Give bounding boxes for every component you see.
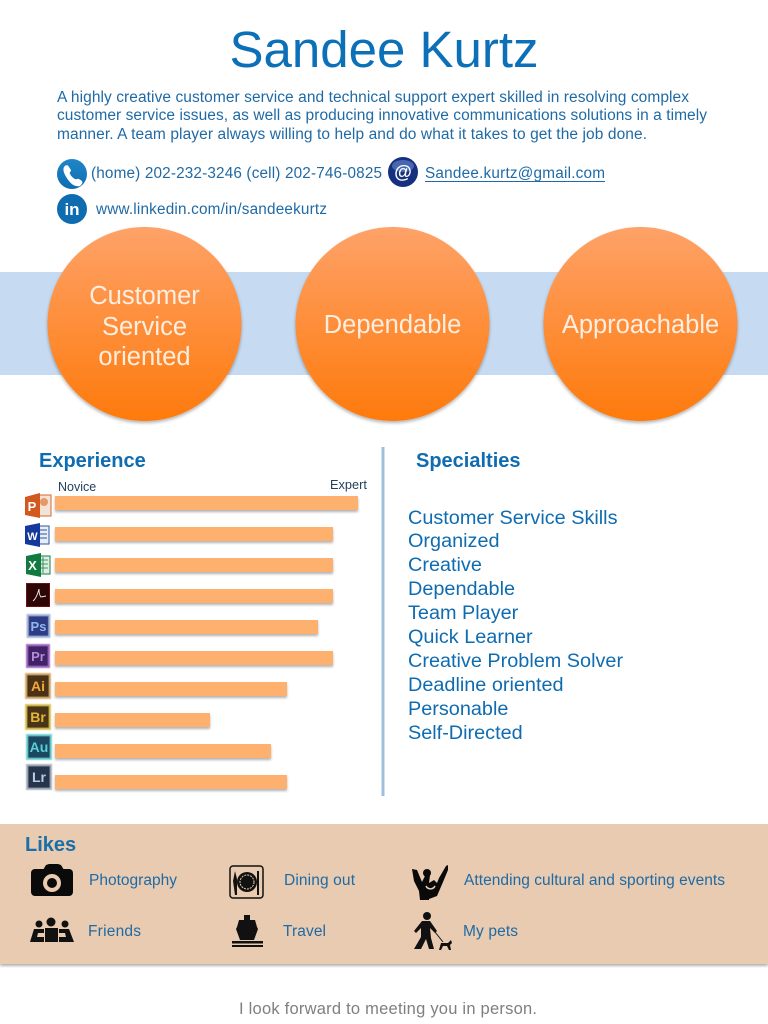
icon: premiere: [27, 645, 49, 667]
icon: events: [412, 865, 448, 900]
trait circle: customer service oriented: Service: [102, 313, 187, 341]
summary text: manner. A team player always willing to help and do what it takes to get the job done.: [57, 126, 647, 143]
icon: audition: Au: [30, 739, 48, 755]
heading: likes: Likes: [25, 834, 76, 856]
likes label: travel: Travel: [283, 923, 326, 940]
heading: experience: Experience: [39, 450, 146, 472]
icon: photoshop: Ps: [31, 619, 46, 634]
likes label: friends: Friends: [88, 923, 141, 940]
trait circle: dependable: Dependable: [324, 311, 461, 339]
trait circle: customer service oriented: oriented: [98, 343, 191, 371]
likes label: photography: Photography: [89, 872, 177, 889]
contact row: [57, 157, 605, 224]
trait circle: approachable: Approachable: [562, 311, 719, 339]
icon: premiere: Pr: [31, 649, 45, 664]
summary text: customer service issues, as well as producing innovative communications solutions in a timely: [57, 107, 707, 124]
specialties list: Organized: [408, 530, 500, 552]
trait circle: dependable: [296, 227, 490, 421]
icon: powerpoint: [25, 493, 51, 518]
title: Sandee Kurtz: [230, 21, 538, 78]
icon: bridge: [26, 705, 50, 729]
trait circle: customer service oriented: [48, 227, 242, 421]
icon: excel: X: [28, 558, 37, 573]
software icons: [25, 493, 51, 789]
trait circle: customer service oriented: Customer: [89, 282, 200, 310]
specialties list: Team Player: [408, 602, 519, 624]
icon: email: @: [394, 162, 412, 182]
icon: dog walker: [414, 912, 452, 950]
icon: dining: [230, 866, 263, 898]
specialties list: Personable: [408, 698, 508, 720]
heading: specialties: Specialties: [416, 450, 521, 472]
icon: acrobat: [26, 584, 50, 606]
closing line: I look forward to meeting you in person.: [239, 1000, 537, 1018]
email: Sandee.kurtz@gmail.com: [425, 165, 605, 182]
specialties list: Creative Problem Solver: [408, 650, 623, 672]
icon: friends: [30, 918, 74, 942]
icon: lightroom: [27, 765, 51, 789]
specialties list: Dependable: [408, 578, 515, 600]
icon: word: W: [27, 531, 38, 543]
icon: ship: [232, 915, 263, 947]
icon: camera: [31, 864, 73, 896]
panel: likes: [0, 824, 768, 964]
icon: audition: [27, 735, 51, 759]
specialties list: Self-Directed: [408, 722, 523, 744]
label: expert: Expert: [330, 477, 367, 492]
summary text: [57, 89, 707, 143]
likes label: my pets: My pets: [463, 923, 518, 940]
icon: linkedin: in: [64, 200, 80, 219]
icon: linkedin: [57, 194, 87, 224]
icon: illustrator: [26, 674, 50, 698]
icon: email: [388, 157, 418, 187]
icon: photoshop: [28, 615, 50, 637]
trait circle: approachable: [544, 227, 738, 421]
likes label: events: Attending cultural and sporting events: [464, 872, 725, 889]
specialties list: [408, 507, 623, 744]
experience bar chart: [55, 496, 358, 789]
phone numbers: (home) 202-232-3246 (cell) 202-746-0825: [91, 165, 382, 182]
icon: word: [25, 523, 49, 547]
icon: bridge: Br: [30, 709, 46, 725]
label: novice: Novice: [58, 480, 96, 494]
icon: lightroom: Lr: [32, 769, 47, 785]
divider: [382, 447, 384, 796]
icon: illustrator: Ai: [31, 678, 45, 694]
likes label: dining out: Dining out: [284, 872, 356, 889]
summary text: A highly creative customer service and technical support expert skilled in resolving complex: [57, 89, 689, 106]
blue band: [0, 272, 768, 375]
specialties list: Quick Learner: [408, 626, 533, 648]
linkedin url: www.linkedin.com/in/sandeekurtz: [95, 201, 327, 218]
icon: phone: [57, 159, 87, 189]
specialties list: Creative: [408, 554, 482, 576]
specialties list: Customer Service Skills: [408, 507, 618, 529]
icon: excel: [26, 553, 50, 577]
specialties list: Deadline oriented: [408, 674, 564, 696]
icon: powerpoint: P: [28, 499, 37, 514]
